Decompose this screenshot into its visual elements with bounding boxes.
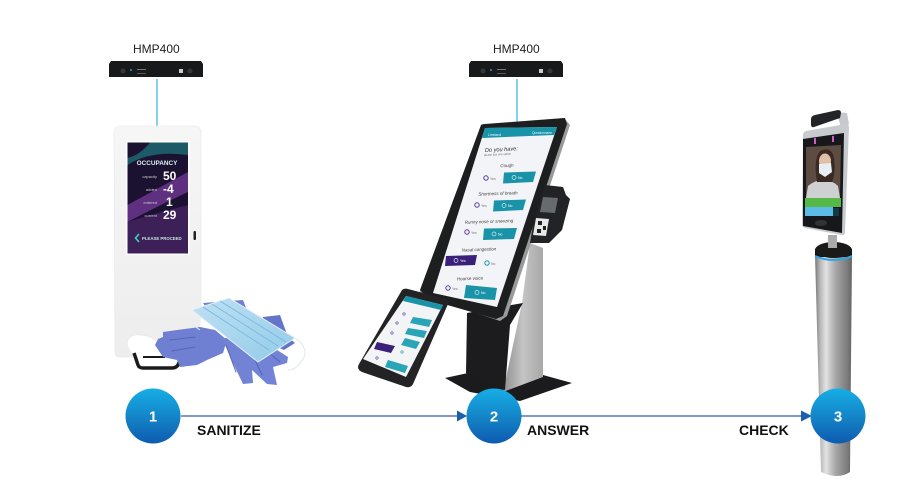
kiosk screen: Nasal congestion [462, 246, 497, 253]
step 1 circle [126, 388, 180, 444]
kiosk screen: Yes [452, 287, 458, 291]
glove behind mask [203, 300, 250, 320]
kiosk base [445, 373, 572, 401]
kiosk screen: No [498, 232, 503, 236]
flow line 1 to 2 [181, 410, 467, 422]
kiosk screen: No [518, 176, 523, 180]
dispenser screen: PLEASE PROCEED [142, 236, 182, 241]
dispenser handle [134, 353, 180, 368]
step 3 label: CHECK [739, 422, 789, 438]
temperature check kiosk [802, 110, 852, 476]
connector line 1 [156, 79, 158, 127]
kiosk screen: please tick one option [484, 152, 512, 157]
step 1 circle: 1 [149, 408, 157, 426]
person photo [806, 150, 840, 198]
smartphone [358, 289, 448, 387]
dispenser screen: current [145, 213, 158, 218]
dispenser screen [126, 141, 190, 255]
dispenser screen: capacity [142, 174, 157, 179]
kiosk screen: Yes [460, 259, 466, 263]
payment reader [530, 185, 570, 243]
dispenser screen: entered [143, 200, 157, 205]
kiosk screen: Yes [471, 231, 477, 235]
sanitizer dispenser [114, 126, 201, 368]
kiosk screen: Yes [481, 204, 487, 208]
questionnaire kiosk [418, 118, 572, 401]
step 2 label: ANSWER [527, 422, 589, 438]
kiosk screen: No [508, 204, 513, 208]
kiosk screen: Runny nose or sneezing [465, 218, 514, 225]
media player device 2 [469, 61, 563, 77]
left glove [155, 327, 227, 367]
kiosk screen: No [491, 262, 496, 266]
media player device 1 [109, 61, 203, 77]
step 2 circle [466, 388, 522, 444]
media player label 2: HMP400 [493, 42, 540, 56]
dispenser screen: OCCUPANCY [137, 160, 178, 167]
dispenser screen: 29 [163, 208, 177, 222]
dispenser screen: 1 [166, 195, 173, 209]
kiosk screen: Cough [500, 163, 514, 168]
step 3 circle: 3 [834, 408, 842, 426]
kiosk frame [418, 118, 570, 321]
kiosk screen: Questionnaire [532, 131, 552, 135]
tablet frame [802, 124, 849, 235]
step 3 circle [810, 388, 866, 444]
camera module [811, 110, 849, 127]
dispenser screen: -4 [163, 182, 174, 196]
dispenser screen: 50 [163, 169, 177, 183]
tablet screen [803, 133, 844, 233]
kiosk screen: Hoarse voice [457, 276, 484, 281]
step 1 label: SANITIZE [197, 422, 261, 438]
kiosk screen: Yes [490, 177, 496, 181]
kiosk screen [433, 127, 557, 307]
surgical mask [192, 298, 305, 370]
dispenser body [114, 126, 201, 357]
dispenser side slot [194, 231, 196, 240]
kiosk screen: No [481, 291, 486, 295]
right glove [222, 338, 288, 385]
kiosk screen: Lineland [488, 133, 501, 137]
kiosk screen: Shortness of breath [478, 190, 518, 197]
step 2 circle: 2 [490, 408, 498, 426]
flow line 2 to 3 [521, 410, 812, 422]
kiosk printer housing [466, 303, 523, 390]
connector line 2 [516, 79, 518, 122]
pole collar [815, 235, 852, 260]
dispenser screen: added [146, 187, 157, 192]
kiosk stand [503, 243, 543, 392]
phone screen [363, 296, 443, 377]
gloves [155, 300, 295, 385]
kiosk screen: Do you have: [485, 146, 518, 154]
kiosk pole [815, 255, 852, 476]
media player label 1: HMP400 [133, 42, 180, 56]
